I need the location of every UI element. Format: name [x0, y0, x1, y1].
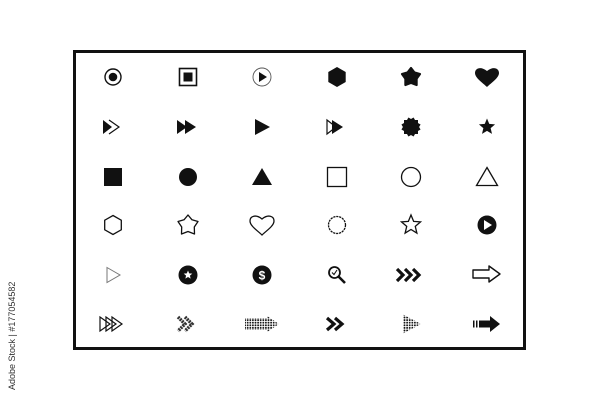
icon: heart filled: [475, 68, 499, 87]
icon: square filled: [104, 168, 122, 186]
icon: star badge: [178, 266, 198, 284]
icon: triangle filled: [252, 168, 272, 185]
icon: fast forward: [177, 120, 196, 134]
icon: dollar badge: [252, 266, 272, 284]
icon: play outline thin: [107, 268, 120, 282]
icon: triangle outline: [476, 168, 498, 186]
icon: play circle filled: [478, 216, 496, 234]
icon: dollar badge: $: [259, 268, 266, 282]
frame: [74, 52, 524, 348]
icon: magnifier check: [329, 267, 345, 283]
icon: triple chevrons: [397, 269, 419, 281]
icon: hexagon filled: [328, 67, 346, 87]
icon: dotted triangle: [403, 314, 421, 334]
icon: radio circle: [105, 69, 121, 85]
icon grid: [100, 67, 500, 334]
icon: circle filled: [179, 168, 197, 186]
side credit text: Adobe Stock | #177054582: [7, 282, 17, 390]
icon: dotted arrow: [245, 316, 279, 332]
icon: dotted double chevrons: [178, 317, 192, 331]
icon: fat star: [402, 68, 420, 85]
icon: square outline: [328, 168, 346, 186]
icon: triple outline play: [100, 317, 122, 331]
icon: scalloped outline: [328, 216, 346, 234]
icon: hexagon outline: [105, 216, 121, 234]
icon: square in square: [180, 68, 196, 86]
icon: scalloped badge filled: [401, 117, 421, 137]
icon: play triangle: [255, 119, 270, 135]
icon: fat star outline: [178, 215, 198, 234]
icon: play + outline play: [103, 120, 119, 134]
icon: small star filled: [479, 118, 495, 134]
icon: solid arrow with stripes: [473, 316, 500, 332]
icon: heart outline: [250, 216, 274, 235]
icon: outline + filled play: [327, 120, 343, 134]
icon: outline arrow: [473, 266, 500, 282]
icon: double chevrons: [327, 318, 342, 330]
icon: circle outline: [402, 168, 420, 186]
icon: star outline: [401, 215, 421, 233]
icon: play circle outline: [253, 68, 271, 86]
